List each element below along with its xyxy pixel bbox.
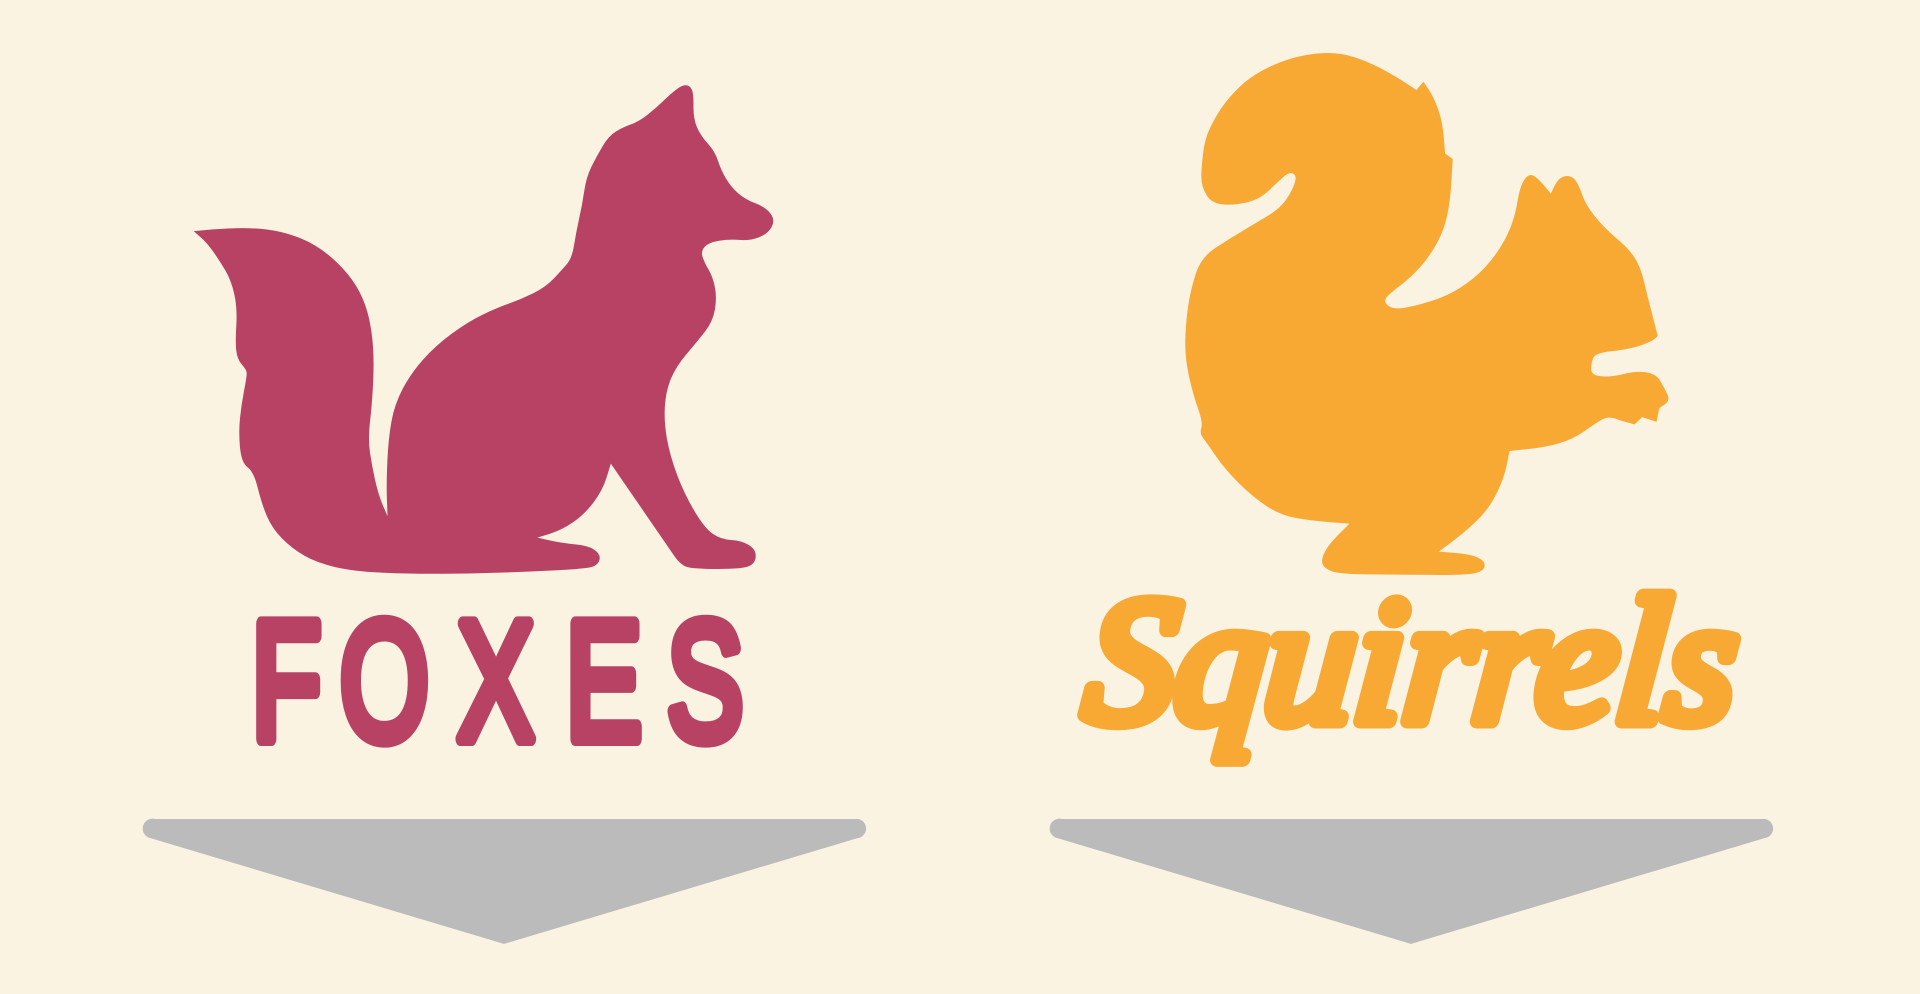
heading: Squirrels: Squirrels xyxy=(1079,561,1746,761)
heading: Foxes: FOXES xyxy=(252,588,743,775)
icon: squirrel silhouette xyxy=(1185,53,1668,575)
arrow: down under foxes xyxy=(143,819,866,944)
icon: fox silhouette xyxy=(194,85,773,574)
arrow: down under squirrels xyxy=(1050,819,1773,944)
